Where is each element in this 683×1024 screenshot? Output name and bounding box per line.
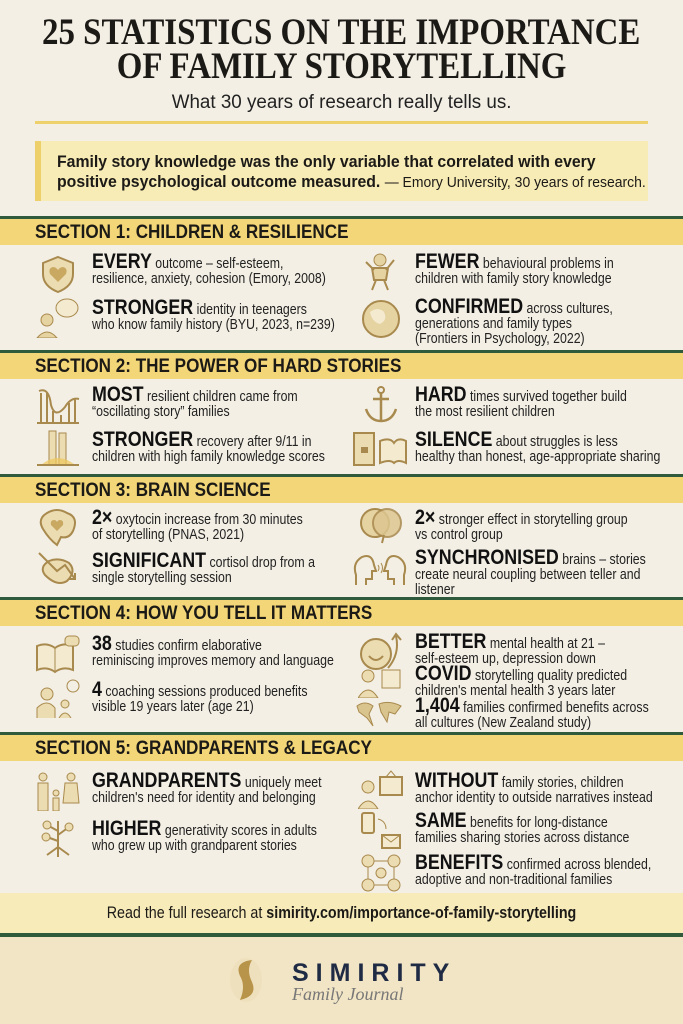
quote callout: positive psychological outcome measured. — Emory University, 30 years of research. [57,172,646,191]
stat: 1,404 families: 1,404 families confirmed benefits across [415,694,649,717]
stat: silence [415,428,660,465]
stat: fewer: FEWER behavioural problems in [415,250,614,273]
quote callout [35,141,648,201]
icon: grandparents [35,771,81,811]
stat: confirmed: CONFIRMED across cultures, [415,295,613,318]
stat: same [415,813,629,846]
stat: higher: HIGHER generativity scores in adults [92,817,317,840]
section 3 heading [0,477,683,503]
stat: 2x stronger: vs control group [415,527,503,543]
stat: 4 coaching [92,678,308,715]
stat: 38 studies: reminiscing improves memory and language [92,653,334,669]
stat: fewer [415,250,614,287]
stat: stronger recovery [92,428,325,465]
stat: grandparents: GRANDPARENTS uniquely meet [92,769,322,792]
section 1 heading [0,219,683,245]
icon: family calendar [358,670,400,698]
stat: better [415,630,605,667]
stat: 2x stronger: 2× stronger effect in storytelling group [415,506,628,529]
stat: benefits: adoptive and non-traditional families [415,872,612,888]
stat: hard: HARD times survived together build [415,383,627,406]
icon: towers [37,430,79,466]
icon: jumping child [365,254,395,290]
panel: section 1 [36,250,614,347]
stat: every [92,250,326,287]
stat: benefits [415,855,651,888]
icon: connected family [358,853,404,893]
icon: logo mark [228,956,264,1004]
stat: covid [415,662,627,699]
section 5 heading: SECTION 5: GRANDPARENTS & LEGACY [35,738,372,759]
stat: stronger identity: who know family history (BYU, 2023, n=239) [92,317,335,333]
stat: most [92,383,298,420]
stat: higher: who grew up with grandparent stories [92,838,297,854]
stat: covid: children's mental health 3 years later [415,683,615,699]
stat: significant [92,549,315,586]
stat: better: self-esteem up, depression down [415,651,596,667]
stat: 2x oxytocin: of storytelling (PNAS, 2021) [92,527,244,543]
stat: 38 studies: 38 studies confirm elaborative [92,632,262,655]
icon: brain arrow down [38,552,76,584]
stat: most: “oscillating story” families [92,404,230,420]
stat: hard: the most resilient children [415,404,555,420]
section 2 heading: SECTION 2: THE POWER OF HARD STORIES [35,356,401,377]
icon: thinking person [36,298,78,338]
stat: silence: SILENCE about struggles is less [415,428,618,451]
logo text: SIMIRITY [292,959,456,987]
icon: person tv [358,769,404,809]
icon: parent child clock [36,680,80,718]
icon: two heads [354,555,406,585]
stat: grandparents [92,773,322,806]
section 2 heading [0,353,683,379]
stat: same: SAME benefits for long-distance [415,809,608,832]
stat: confirmed: (Frontiers in Psychology, 2022) [415,331,585,347]
stat: significant: single storytelling session [92,570,232,586]
subtitle: What 30 years of research really tells us. [172,92,511,113]
stat: 2x oxytocin [92,506,303,543]
section 5 heading [0,735,683,761]
stat: without [415,773,653,806]
icon: globe people [362,300,400,338]
title: 25 STATISTICS ON THE IMPORTANCE [42,12,641,53]
icon: locked book and open book [353,432,407,466]
stat: 4 coaching: 4 coaching sessions produced benefits [92,678,307,701]
section 1 heading: SECTION 1: CHILDREN & RESILIENCE [35,222,349,243]
stat: 2x oxytocin: 2× oxytocin increase from 30 minutes [92,506,303,529]
stat: 38 studies [92,632,334,669]
icon: brain heart [40,509,76,546]
stat: 1,404 families [415,694,649,731]
stat: 1,404 families: all cultures (New Zealand study) [415,715,591,731]
stat: synchronised: SYNCHRONISED brains – stories [415,546,646,569]
stat: confirmed [415,295,613,347]
icon: phone to letter [358,811,404,851]
stat: stronger identity [92,296,335,333]
panel: section 2 [37,383,660,466]
section 4 heading: SECTION 4: HOW YOU TELL IT MATTERS [35,603,372,624]
stat: synchronised: create neural coupling between teller and [415,567,640,583]
stat: every: EVERY outcome – self-esteem, [92,250,283,273]
icon: smile arrow [360,632,402,670]
section 4 heading [0,600,683,626]
stat: without: WITHOUT family stories, children [415,769,624,792]
stat: fewer: children with family story knowledge [415,271,612,287]
section 3 heading: SECTION 3: BRAIN SCIENCE [35,480,271,501]
stat: higher [92,821,317,854]
logo [228,956,458,1006]
stat: confirmed: generations and family types [415,316,572,332]
icon: anchor [364,386,398,422]
stat: 4 coaching: visible 19 years later (age 21) [92,699,254,715]
stat: better: BETTER mental health at 21 – [415,630,605,653]
stat: 2x stronger [415,506,628,543]
panel: section 3 [38,506,646,598]
stat: every: resilience, anxiety, cohesion (Emory, 2008) [92,271,326,287]
stat: silence: healthy than honest, age-appropriate sharing [415,449,660,465]
stat: stronger recovery: children with high family knowledge scores [92,449,325,465]
icon: open book speech [36,636,80,674]
panel: section 5 [0,761,683,891]
stat: covid: COVID storytelling quality predicted [415,662,627,685]
stat: stronger identity: STRONGER identity in teenagers [92,296,307,319]
icon: shield heart [42,256,74,293]
stat: same: families sharing stories across distance [415,830,629,846]
icon: world map [356,702,402,726]
footer link band [0,893,683,933]
panel: section 4 [36,630,649,731]
icon: roller coaster [37,389,80,424]
stat: grandparents: children's need for identity and belonging [92,790,316,806]
stat: without: anchor identity to outside narratives instead [415,790,653,806]
footer link band: Read the full research at simirity.com/importance-of-family-storytelling [107,903,576,922]
logo: Family Journal [292,984,403,1004]
stat: significant: SIGNIFICANT cortisol drop from a [92,549,315,572]
title [42,12,641,87]
quote callout: Family story knowledge was the only variable that correlated with every [57,152,596,171]
stat: synchronised [415,546,646,598]
title: OF FAMILY STORYTELLING [117,46,566,87]
icon: tree with roots [35,817,81,857]
stat: hard [415,383,627,420]
stat: synchronised: listener [415,582,455,598]
stat: stronger recovery: STRONGER recovery after 9/11 in [92,428,311,451]
stat: most: MOST resilient children came from [92,383,298,406]
stat: benefits: BENEFITS confirmed across blended, [415,851,651,874]
icon: overlapping brains [360,508,402,544]
